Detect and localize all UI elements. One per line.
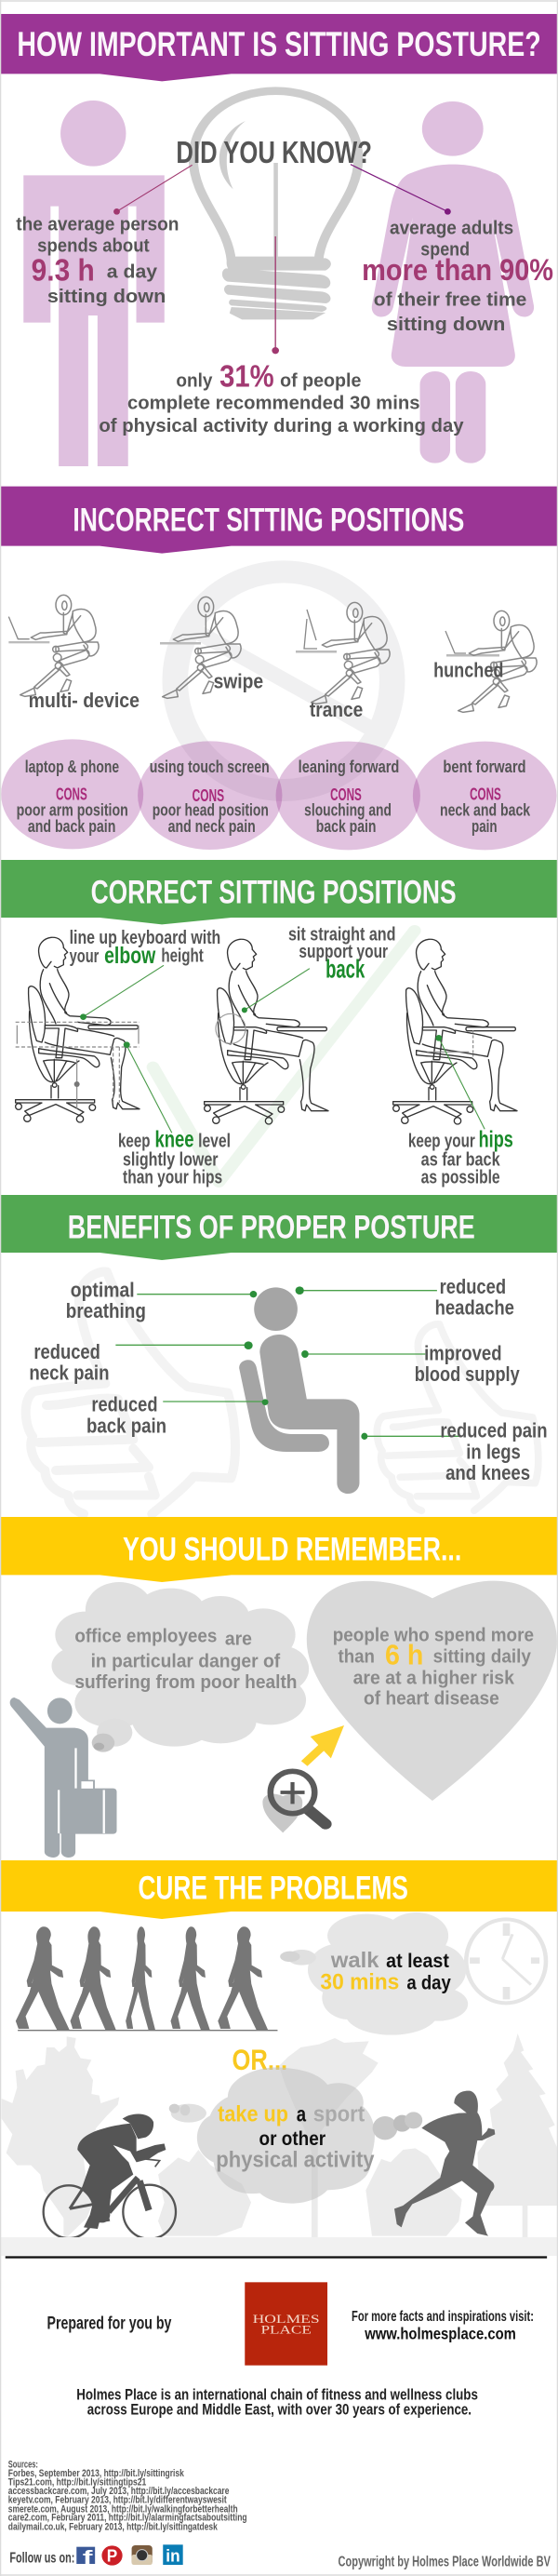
text: only 31%: complete recommended 30 mins <box>127 392 420 413</box>
thought cloud: are <box>225 1628 252 1649</box>
text: only 31%: of people <box>280 369 361 391</box>
labels: posture names: swipe <box>214 671 263 693</box>
illustration: seated woman with measurement guides <box>16 937 140 1122</box>
connector: bottom callout <box>272 236 279 354</box>
callout: optimal breathing <box>66 1280 257 1323</box>
callout: reduced pain in legs and knees: and knees <box>445 1462 530 1485</box>
callout: optimal breathing: optimal <box>71 1280 135 1302</box>
logo: holmes place: HOLMES <box>253 2313 320 2326</box>
icon: female figure <box>372 101 534 463</box>
icon: prohibition sign <box>175 571 392 790</box>
icon: male figure <box>23 101 165 466</box>
callout: elbow: height <box>161 946 204 966</box>
labels: posture names <box>29 660 503 722</box>
panel: benefits of proper posture <box>0 1195 558 1514</box>
heading: or: OR... <box>232 2044 287 2076</box>
thought cloud: walk <box>280 1912 468 2035</box>
heart callout: of heart disease <box>364 1687 499 1709</box>
callout: back: sit straight and <box>288 924 396 945</box>
labels: posture names: hunched <box>433 660 503 682</box>
text: sources: Sources: <box>8 2458 38 2470</box>
section banner <box>0 487 558 554</box>
callout: elbow: your <box>70 946 100 967</box>
circle: bent forward: CONS <box>470 785 501 804</box>
icon: facebook: f <box>83 2546 93 2569</box>
text: only 31%: of physical activity during a working day <box>99 414 464 436</box>
callout: hips: keep your <box>408 1131 475 1151</box>
ground strip <box>0 2237 558 2256</box>
icon: pinterest <box>101 2545 123 2566</box>
text: did you know heading: DID YOU KNOW? <box>176 135 372 169</box>
panel: incorrect sitting positions <box>0 487 558 850</box>
text: more than 90%: sitting down <box>387 313 505 335</box>
callout: optimal breathing: breathing <box>66 1300 146 1323</box>
illustration: hunched posture <box>445 610 537 712</box>
illustration: seated woman with lumbar support <box>205 939 328 1124</box>
illustration: multi-device posture <box>8 595 99 696</box>
icon: clock <box>466 1919 546 2003</box>
text: sources <box>8 2458 247 2532</box>
circle: using touch screen: and neck pain <box>168 817 256 837</box>
callout: back: back <box>326 956 365 984</box>
circle: laptop and phone: CONS <box>56 785 87 804</box>
illustration: swipe posture <box>160 597 241 698</box>
text: 9.3 h a day: a day <box>107 261 158 282</box>
thought cloud: in particular danger of <box>91 1650 281 1671</box>
section banner <box>0 1860 558 1919</box>
thought cloud: walk: walk <box>330 1949 379 1973</box>
text: 9.3 h a day: the average person <box>16 213 179 235</box>
heart callout <box>307 1581 557 1801</box>
text: website <box>352 2309 534 2343</box>
callout: hips: as possible <box>421 1167 500 1187</box>
section banner <box>0 1195 558 1260</box>
title banner <box>0 14 558 81</box>
circle: using touch screen: poor head position <box>153 801 269 820</box>
callout: knee: slightly lower <box>123 1149 219 1170</box>
illustration: trance posture <box>296 602 390 704</box>
text: only 31%: only <box>176 369 213 391</box>
callout: hips <box>408 1035 513 1187</box>
circle: leaning forward <box>276 742 420 850</box>
circle: leaning forward: leaning forward <box>299 758 399 777</box>
text: 9.3 h a day <box>16 213 179 307</box>
labels: posture names: trance <box>310 699 363 722</box>
text: follow us on: Follow us on: <box>9 2550 74 2566</box>
arrow: to heart <box>304 1725 344 1764</box>
circle: using touch screen <box>138 741 282 850</box>
thought cloud <box>51 1582 309 1752</box>
icon: pinterest: P <box>107 2547 117 2566</box>
illustration: seated woman with hips back <box>393 939 517 1124</box>
text: sources: keyetv.com, February 2013, http://bit.ly/differentwayswesit <box>8 2493 227 2505</box>
circle: laptop and phone <box>1 739 143 849</box>
panel: footer <box>6 2256 551 2569</box>
icon: thumbs up left <box>26 1272 235 1514</box>
thought cloud: sport <box>169 2068 422 2204</box>
circle: laptop and phone: and back pain <box>28 817 115 837</box>
text: sources: Tips21.com, http://bit.ly/sittingtips21 <box>8 2475 147 2488</box>
text: only 31%: 31% <box>219 359 274 394</box>
text: 9.3 h a day: 9.3 h <box>32 253 95 288</box>
scenery: background trees <box>2 2033 558 2237</box>
icon: facebook <box>76 2546 95 2569</box>
text: sources: dailymail.co.uk, February 2013, http://bit.ly/sittingatdesk <box>8 2520 218 2532</box>
text: sources: smerete.com, August 2013, http://bit.ly/walkingforbetterhealth <box>8 2502 238 2515</box>
icon: cyclist <box>44 2113 176 2239</box>
panel: cure the problems <box>0 1860 558 2256</box>
circle: bent forward: pain <box>472 817 498 837</box>
callout: reduced pain in legs and knees: in legs <box>466 1442 521 1464</box>
logo: holmes place: PLACE <box>260 2323 312 2336</box>
callout: knee: than your hips <box>123 1167 222 1187</box>
icon: magnifier over small heart <box>262 1771 326 1832</box>
callout: knee: level <box>198 1131 231 1151</box>
icon: walking figures <box>16 1926 277 2031</box>
callout: reduced headache: headache <box>435 1297 514 1320</box>
circle: using touch screen: CONS <box>193 786 224 806</box>
thought cloud: sport: or other <box>259 2127 326 2150</box>
icon: runner <box>394 2091 495 2236</box>
circle: leaning forward: CONS <box>330 785 362 805</box>
callout: reduced back pain: back pain <box>86 1415 166 1438</box>
thought cloud: office employees <box>74 1625 217 1646</box>
circle: bent forward <box>413 742 556 850</box>
divider line <box>6 2256 547 2259</box>
callout: reduced back pain <box>86 1394 269 1438</box>
callout: knee <box>118 1041 231 1187</box>
text: prepared for you by: Prepared for you by <box>47 2314 172 2333</box>
icon: thumbs up right <box>377 1324 538 1510</box>
callout: hips: hips <box>479 1125 513 1152</box>
icon: light bulb <box>193 91 358 319</box>
thought cloud: sport: physical activity <box>216 2148 375 2172</box>
circle: laptop and phone: laptop & phone <box>25 758 119 777</box>
thought cloud: walk: a day <box>406 1971 451 1993</box>
thought cloud: walk: 30 mins <box>320 1970 399 1994</box>
callout: elbow: line up keyboard with <box>70 927 220 948</box>
logo: holmes place <box>245 2282 327 2366</box>
icon: seated figure <box>239 1287 359 1494</box>
section banner: CURE THE PROBLEMS <box>138 1870 408 1906</box>
callout: reduced pain in legs and knees <box>361 1420 548 1485</box>
heart callout: are at a higher risk <box>353 1667 514 1688</box>
icon: large check mark <box>153 931 415 1182</box>
circle: leaning forward: back pain <box>316 817 376 837</box>
text: 9.3 h a day: sitting down <box>47 285 166 307</box>
text: more than 90%: of their free time <box>374 288 526 310</box>
callout: improved blood supply: improved <box>424 1343 502 1365</box>
callout: improved blood supply <box>301 1343 520 1387</box>
panel: how important is sitting posture <box>0 14 558 466</box>
section banner <box>0 1517 558 1582</box>
connector: right callout <box>351 165 451 215</box>
panel: you should remember <box>0 1517 558 1858</box>
callout: knee: keep <box>118 1131 150 1151</box>
callout: back: support your <box>299 941 389 962</box>
icon: linkedin: in <box>166 2547 180 2566</box>
text: only 31% <box>99 359 464 436</box>
connector: left callout <box>113 165 193 215</box>
text: sources: Forbes, September 2013, http://bit.ly/sittingrisk <box>8 2467 184 2479</box>
text: about holmes place <box>76 2386 478 2418</box>
callout: reduced neck pain <box>29 1341 253 1385</box>
callout: reduced back pain: reduced <box>91 1394 158 1416</box>
thought cloud: walk: at least <box>386 1949 449 1972</box>
text: more than 90% <box>362 217 553 335</box>
thought cloud: suffering from poor health <box>74 1670 298 1693</box>
callout: elbow: elbow <box>104 942 156 969</box>
text: 9.3 h a day: spends about <box>37 235 150 256</box>
callout: reduced neck pain: reduced <box>33 1341 100 1364</box>
thought cloud: sport: a <box>297 2103 306 2127</box>
icon: businessman with briefcase <box>10 1697 117 1858</box>
callout: improved blood supply: blood supply <box>415 1363 520 1387</box>
thought cloud: sport: take up <box>218 2102 288 2127</box>
circle: laptop and phone: poor arm position <box>17 801 128 820</box>
heart callout: sitting daily <box>433 1645 531 1667</box>
labels: posture names: multi- device <box>29 690 140 713</box>
text: sources: accessbackcare.com, July 2013, http://bit.ly/accesbackcare <box>8 2485 230 2497</box>
callout: reduced headache: reduced <box>440 1276 506 1299</box>
callout: reduced neck pain: neck pain <box>29 1362 109 1385</box>
callout: hips: as far back <box>421 1149 500 1170</box>
panel: correct sitting positions <box>0 860 558 1187</box>
text: more than 90%: average adults <box>390 217 513 238</box>
callout: elbow <box>70 927 220 1020</box>
heart callout: than <box>339 1645 375 1667</box>
text: sources: care2.com, February 2011, http://bit.ly/alarmingfactsaboutsitting <box>8 2511 247 2523</box>
icon: instagram <box>132 2545 153 2565</box>
callout: reduced headache <box>296 1276 514 1320</box>
callout: back <box>242 924 396 1013</box>
text: more than 90%: spend <box>420 238 470 260</box>
section banner <box>0 860 558 924</box>
circle: using touch screen: using touch screen <box>150 758 270 777</box>
thought cloud: sport: sport <box>313 2102 365 2127</box>
circle: leaning forward: slouching and <box>304 801 392 820</box>
callout: knee: knee <box>154 1125 194 1152</box>
heart callout: 6 h <box>385 1638 423 1670</box>
